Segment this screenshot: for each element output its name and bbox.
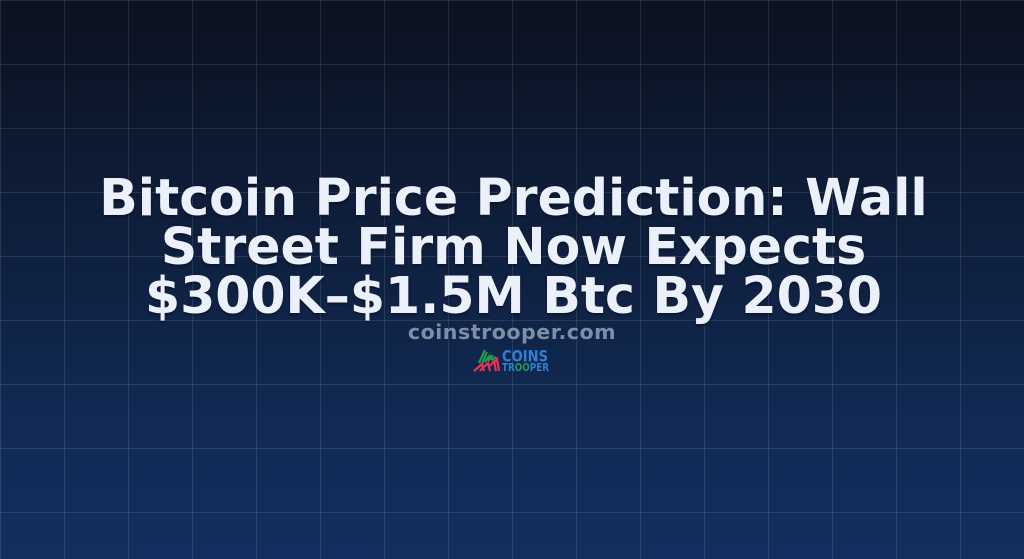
title: $300K–$1.5M Btc By 2030 (145, 266, 882, 324)
icon: Coins Trooper logo (473, 346, 549, 374)
source domain: coinstrooper.com (408, 320, 616, 344)
title (99, 168, 928, 326)
title: Bitcoin Price Prediction: Wall (99, 168, 928, 226)
title: Street Firm Now Expects (161, 216, 866, 276)
